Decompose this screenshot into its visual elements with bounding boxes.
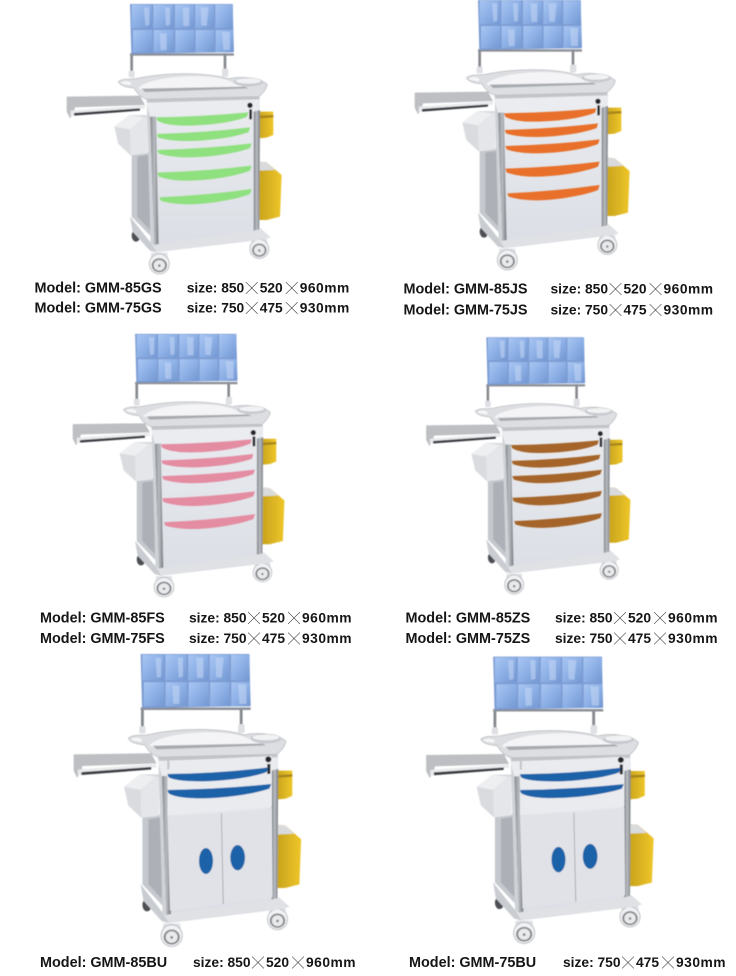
- caption: GMM-75BU: ╳: [662, 954, 674, 971]
- caption: pink models: 960mm: [302, 610, 352, 626]
- caption: GMM-75BU: 930mm: [676, 955, 726, 970]
- caption: pink models: Model: GMM-85FS: [40, 610, 165, 626]
- caption: brown models: Model: GMM-75ZS: [406, 631, 531, 647]
- caption: pink models: ╳: [248, 630, 260, 647]
- caption: green models: Model: GMM-75GS: [34, 301, 162, 317]
- caption: green models: [34, 280, 350, 317]
- caption: orange models: size: 750: [550, 302, 608, 318]
- panel: GMM-85GS / 75GS green trolley: [34, 4, 350, 317]
- caption: GMM-75BU: ╳: [622, 954, 634, 971]
- caption: brown models: 930mm: [668, 631, 718, 646]
- caption: green models: ╳: [246, 300, 258, 317]
- caption: brown models: ╳: [614, 610, 626, 626]
- caption: brown models: ╳: [654, 610, 666, 626]
- caption: brown models: Model: GMM-85ZS: [406, 610, 531, 626]
- caption: GMM-85BU: [40, 954, 356, 971]
- caption: brown models: 520: [628, 610, 651, 626]
- caption: brown models: 960mm: [668, 610, 718, 626]
- caption: pink models: 520: [262, 610, 285, 626]
- trolley: orange drawers: [415, 0, 630, 270]
- trolley: green drawers: [67, 4, 282, 274]
- caption: green models: size: 750: [187, 301, 245, 316]
- caption: green models: 960mm: [300, 281, 350, 296]
- caption: green models: 475: [260, 301, 283, 316]
- caption: GMM-85BU: size: 850: [193, 955, 251, 970]
- caption: pink models: 475: [262, 631, 285, 646]
- panel: GMM-85JS / 75JS orange trolley: [404, 0, 714, 318]
- caption: green models: 520: [260, 281, 283, 296]
- caption: orange models: [404, 280, 714, 318]
- caption: brown models: 475: [628, 631, 651, 646]
- caption: orange models: 930mm: [664, 302, 714, 318]
- panel: GMM-85BU blue trolley: [40, 654, 356, 971]
- caption: GMM-75BU: [409, 954, 726, 971]
- caption: GMM-85BU: 960mm: [306, 955, 356, 970]
- caption: GMM-85BU: ╳: [292, 954, 304, 971]
- caption: green models: ╳: [246, 280, 258, 297]
- caption: pink models: Model: GMM-75FS: [40, 631, 165, 647]
- caption: pink models: [40, 610, 352, 647]
- panel: GMM-85ZS / 75ZS brown trolley: [406, 337, 718, 647]
- caption: GMM-85BU: 520: [266, 955, 289, 970]
- caption: green models: ╳: [286, 300, 298, 317]
- caption: brown models: ╳: [654, 630, 666, 647]
- caption: orange models: Model: GMM-75JS: [404, 302, 528, 318]
- trolley: pink drawers: [73, 334, 284, 597]
- trolley: blue drawers and doors: [74, 654, 301, 946]
- trolley: blue drawers and doors, second view: [426, 657, 654, 943]
- caption: orange models: size: 850: [550, 282, 608, 296]
- caption: orange models: 475: [624, 302, 647, 318]
- caption: green models: Model: GMM-85GS: [34, 281, 162, 297]
- caption: pink models: size: 750: [189, 631, 247, 646]
- caption: orange models: ╳: [610, 280, 622, 298]
- caption: pink models: size: 850: [189, 610, 247, 626]
- caption: brown models: ╳: [614, 630, 626, 647]
- caption: green models: size: 850: [187, 281, 245, 296]
- caption: GMM-75BU: Model: GMM-75BU: [409, 955, 536, 971]
- caption: GMM-85BU: ╳: [252, 954, 264, 971]
- caption: orange models: ╳: [610, 302, 622, 318]
- caption: GMM-75BU: 475: [636, 955, 659, 970]
- panel: GMM-85FS / 75FS pink trolley: [40, 334, 352, 647]
- caption: green models: ╳: [286, 280, 298, 297]
- trolley: brown drawers: [426, 337, 630, 594]
- caption: GMM-85BU: Model: GMM-85BU: [40, 955, 167, 971]
- caption: orange models: ╳: [650, 302, 662, 318]
- caption: pink models: ╳: [248, 610, 260, 626]
- caption: orange models: 960mm: [664, 282, 714, 296]
- caption: brown models: size: 850: [555, 610, 613, 626]
- caption: GMM-75BU: size: 750: [563, 955, 621, 970]
- caption: brown models: size: 750: [555, 631, 613, 646]
- caption: orange models: ╳: [650, 280, 662, 298]
- caption: orange models: Model: GMM-85JS: [404, 282, 528, 298]
- panel: GMM-75BU blue trolley: [409, 657, 726, 971]
- caption: pink models: ╳: [288, 610, 300, 626]
- caption: pink models: 930mm: [302, 631, 352, 646]
- caption: orange models: 520: [624, 282, 647, 296]
- caption: pink models: ╳: [288, 630, 300, 647]
- caption: brown models: [406, 610, 718, 647]
- caption: green models: 930mm: [300, 301, 350, 316]
